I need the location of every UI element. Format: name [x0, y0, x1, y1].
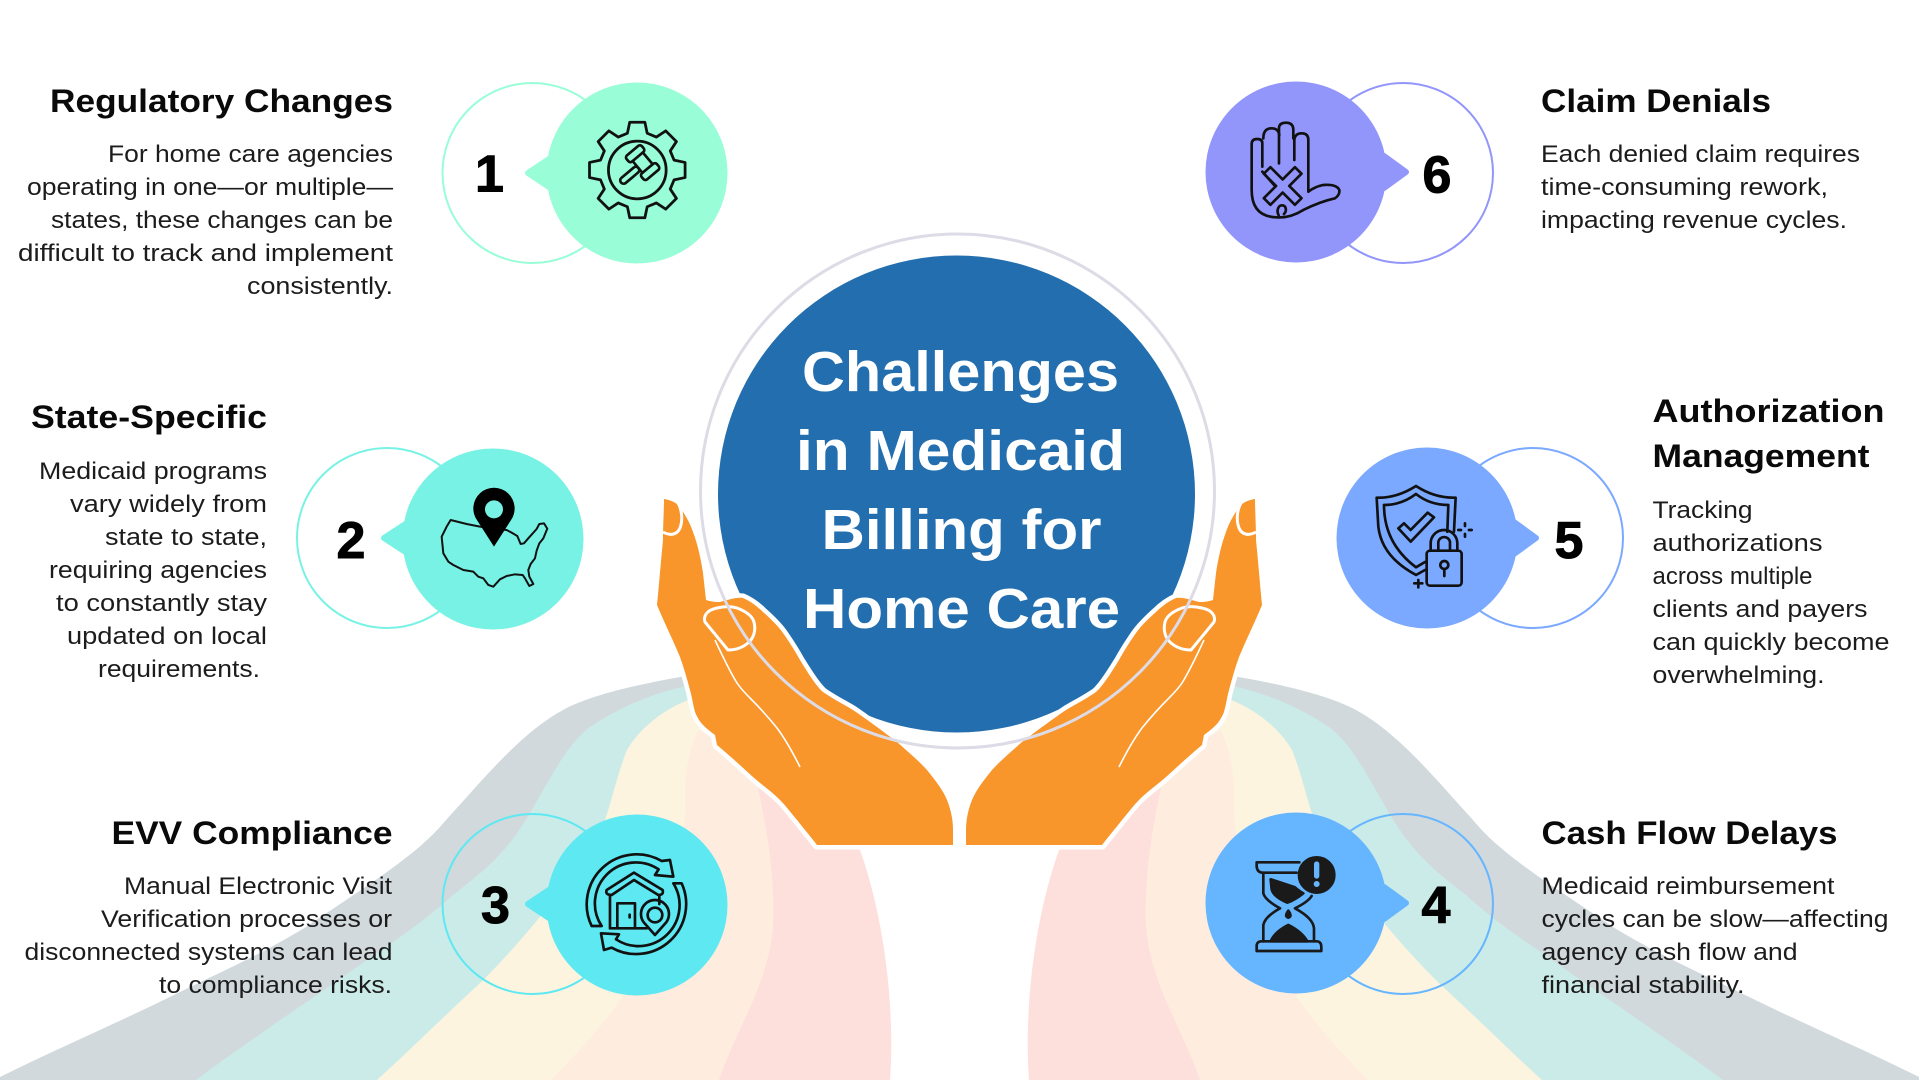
icon: house with cycle arrows — [587, 854, 686, 954]
band right pink — [1028, 775, 1200, 1080]
panel 4: Cash Flow Delays text: cycles can be slow—affecting — [1542, 906, 1888, 933]
icon: gear with gavel — [590, 122, 685, 218]
panel 5: Authorization Management text: Management — [1652, 438, 1870, 474]
panel 5: Authorization Management text — [1652, 393, 1890, 689]
panel 2: State-Specific text: requirements. — [98, 656, 260, 683]
panel 3: EVV Compliance text: to compliance risks. — [159, 972, 392, 999]
badge 4: 4 — [1422, 877, 1451, 935]
panel 5: Authorization Management text: across multiple — [1652, 563, 1812, 590]
panel 1: Regulatory Changes text: Regulatory Changes — [50, 83, 393, 119]
panel 1: Regulatory Changes text: difficult to track and implement — [18, 240, 393, 267]
title: Home Care — [803, 577, 1120, 641]
title: Billing for — [822, 498, 1102, 562]
background rainbow bands — [0, 675, 1919, 1080]
panel 5: Authorization Management text: overwhelming. — [1652, 662, 1824, 689]
panel 4: Cash Flow Delays text: agency cash flow and — [1542, 939, 1798, 966]
right hand — [966, 499, 1262, 845]
panel 6: Claim Denials text: impacting revenue cycles. — [1541, 207, 1847, 234]
central blue circle — [718, 256, 1195, 732]
panel 3: EVV Compliance text: disconnected systems can lead — [24, 939, 392, 966]
panel 6: Claim Denials text — [1541, 83, 1860, 234]
badge 6: 6 — [1423, 146, 1451, 204]
band left cream — [377, 698, 800, 1080]
title: Challenges — [802, 340, 1119, 404]
band right peach — [1119, 730, 1368, 1080]
badge 2: 2 — [337, 512, 365, 570]
band left peach — [551, 730, 800, 1080]
panel 1: Regulatory Changes text: For home care agencies — [108, 141, 393, 168]
title — [796, 340, 1125, 641]
panel 1: Regulatory Changes text — [18, 83, 393, 300]
panel 2: State-Specific text: state to state, — [105, 524, 267, 551]
outer ring around circle — [700, 234, 1214, 748]
icon: raised hand with X — [1252, 123, 1339, 217]
panel 2: State-Specific text: vary widely from — [70, 491, 267, 518]
panel 5: Authorization Management text: clients and payers — [1652, 596, 1868, 623]
panel 5: Authorization Management text: authorizations — [1652, 530, 1822, 557]
left hand — [657, 499, 953, 845]
badge 5 — [1336, 448, 1623, 628]
title: in Medicaid — [796, 419, 1125, 483]
panel 4: Cash Flow Delays text: Cash Flow Delays — [1542, 815, 1838, 851]
band left grey — [0, 675, 800, 1080]
panel 2: State-Specific text: Medicaid programs — [39, 458, 267, 485]
badge 1 — [442, 82, 728, 264]
panel 3: EVV Compliance text: Manual Electronic Visit — [124, 873, 392, 900]
panel 1: Regulatory Changes text: consistently. — [247, 273, 393, 300]
badge 4 — [1206, 812, 1493, 994]
badge 1: 1 — [475, 146, 504, 204]
panel 2: State-Specific text: updated on local — [67, 623, 267, 650]
band left teal — [196, 685, 800, 1080]
band right grey — [1119, 675, 1919, 1080]
panel 1: Regulatory Changes text: states, these changes can be — [51, 207, 393, 234]
icon: hourglass with alert — [1257, 857, 1334, 951]
panel 2: State-Specific text: State-Specific — [31, 399, 267, 435]
panel 4: Cash Flow Delays text — [1542, 815, 1888, 999]
panel 5: Authorization Management text: can quickly become — [1652, 629, 1890, 656]
band right teal — [1119, 685, 1723, 1080]
panel 4: Cash Flow Delays text: financial stability. — [1542, 972, 1744, 999]
band left pink — [719, 775, 891, 1080]
panel 3: EVV Compliance text: EVV Compliance — [112, 815, 392, 851]
panel 6: Claim Denials text: Claim Denials — [1541, 83, 1771, 119]
icon: US map with pin — [442, 488, 547, 587]
panel 5: Authorization Management text: Authorization — [1652, 393, 1884, 429]
panel 2: State-Specific text: to constantly stay — [56, 590, 267, 617]
panel 3: EVV Compliance text — [24, 815, 392, 999]
panel 1: Regulatory Changes text: operating in one—or multiple— — [27, 174, 393, 201]
panel 4: Cash Flow Delays text: Medicaid reimbursement — [1542, 873, 1835, 900]
badge 5: 5 — [1555, 512, 1583, 570]
panel 3: EVV Compliance text: Verification processes or — [101, 906, 392, 933]
panel 2: State-Specific text — [31, 399, 267, 683]
panel 6: Claim Denials text: Each denied claim requires — [1541, 141, 1860, 168]
badge 3: 3 — [481, 877, 510, 935]
badge 6 — [1206, 82, 1493, 263]
panel 5: Authorization Management text: Tracking — [1652, 497, 1752, 524]
panel 6: Claim Denials text: time-consuming rework, — [1541, 174, 1828, 201]
badge 3 — [442, 814, 728, 996]
badge 2 — [297, 448, 584, 630]
panel 2: State-Specific text: requiring agencies — [49, 557, 267, 584]
icon: shield with lock — [1377, 486, 1472, 587]
band right cream — [1119, 698, 1542, 1080]
